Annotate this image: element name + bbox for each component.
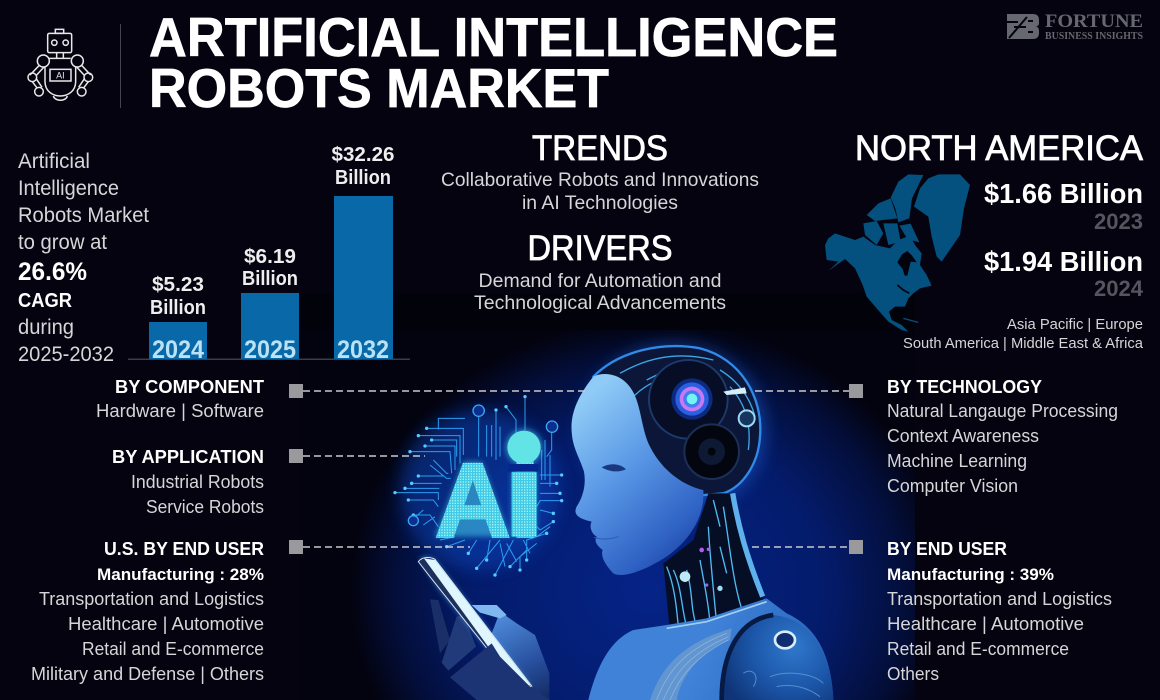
north america stats: Asia Pacific | Europe xyxy=(1007,316,1143,333)
trends block: Collaborative Robots and Innovations xyxy=(441,169,759,191)
CAGR text block xyxy=(18,150,149,366)
segment: by application xyxy=(112,446,264,517)
segment: by technology: Natural Langauge Processing xyxy=(887,401,1118,421)
robot body xyxy=(588,598,833,700)
drivers block: DRIVERS xyxy=(528,229,672,268)
segment: U.S. by end user: Transportation and Logistics xyxy=(39,589,264,609)
connector: by application xyxy=(289,449,425,463)
segment: by end user: Manufacturing : 39% xyxy=(887,566,1054,584)
bar 2032: $32.26 xyxy=(332,144,394,166)
robot skull xyxy=(593,346,760,497)
segment: by end user: BY END USER xyxy=(887,538,1007,559)
bar 2032: 2032 xyxy=(337,336,389,364)
segment: by application: Service Robots xyxy=(146,497,264,517)
bar 2032 xyxy=(332,144,394,364)
segment: by technology: BY TECHNOLOGY xyxy=(887,376,1043,397)
connector: by component xyxy=(289,384,585,398)
segment: by end user: Transportation and Logistics xyxy=(887,589,1112,609)
connector: by end user xyxy=(752,540,863,554)
segment: by component: Hardware | Software xyxy=(96,401,264,421)
north america stats xyxy=(855,129,1144,352)
logo: Fortune Business Insights: FORTUNE xyxy=(1045,12,1143,32)
robot neck xyxy=(663,493,763,633)
bar 2024: $5.23 xyxy=(152,274,204,296)
bar chart xyxy=(128,144,410,364)
drivers block: Technological Advancements xyxy=(474,292,726,314)
segment: U.S. by end user: Healthcare | Automotive xyxy=(68,614,264,634)
logo: Fortune Business Insights xyxy=(1007,12,1143,42)
segment: by technology: Machine Learning xyxy=(887,451,1027,471)
segment: by end user xyxy=(887,538,1112,684)
CAGR text block: Artificial xyxy=(18,150,90,173)
trends block: in AI Technologies xyxy=(522,192,678,214)
trends block: TRENDS xyxy=(532,129,668,168)
drivers block: Demand for Automation and xyxy=(478,270,722,292)
segment: by end user: Others xyxy=(887,664,939,684)
segment: U.S. by end user: U.S. BY END USER xyxy=(104,538,264,559)
north america stats: South America | Middle East & Africa xyxy=(903,335,1144,352)
segment: by application: Industrial Robots xyxy=(131,472,264,492)
bar 2032: Billion xyxy=(335,167,391,189)
segment: U.S. by end user: Retail and E-commerce xyxy=(82,639,264,659)
segment: by component: BY COMPONENT xyxy=(115,376,265,397)
segment: U.S. by end user xyxy=(31,538,264,684)
bar 2024 xyxy=(149,274,207,364)
segment: U.S. by end user: Military and Defense | Others xyxy=(31,664,264,684)
logo: Fortune Business Insights: BUSINESS INSIGHTS xyxy=(1045,31,1143,42)
CAGR text block: 2025-2032 xyxy=(18,343,114,366)
AI chip hologram: Ai xyxy=(435,443,540,560)
AI chip hologram xyxy=(393,395,563,577)
connector: by technology xyxy=(755,384,863,398)
bar 2025: Billion xyxy=(242,268,298,290)
north america map xyxy=(825,174,970,332)
CAGR text block: Intelligence xyxy=(18,177,119,200)
CAGR text block: 26.6% xyxy=(18,258,87,286)
north america stats: $1.94 Billion xyxy=(984,246,1143,277)
bar 2025 xyxy=(241,246,299,364)
bar 2025: 2025 xyxy=(244,336,296,364)
segment: by technology: Computer Vision xyxy=(887,476,1018,496)
north america stats: $1.66 Billion xyxy=(984,178,1143,209)
segment: by end user: Retail and E-commerce xyxy=(887,639,1069,659)
segment: by end user: Healthcare | Automotive xyxy=(887,614,1084,634)
bar 2025: $6.19 xyxy=(244,246,296,268)
drivers block xyxy=(474,229,726,314)
bar 2024: 2024 xyxy=(152,336,204,364)
segment: U.S. by end user: Manufacturing : 28% xyxy=(97,566,264,584)
segment: by technology: Context Awareness xyxy=(887,426,1039,446)
robot hand and phone xyxy=(418,557,550,700)
robot icon xyxy=(28,29,93,100)
CAGR text block: during xyxy=(18,316,74,339)
bar 2024: Billion xyxy=(150,297,206,319)
trends block xyxy=(441,129,759,214)
segment: by application: BY APPLICATION xyxy=(112,446,264,467)
header divider xyxy=(120,24,121,108)
north america stats: NORTH AMERICA xyxy=(855,129,1144,168)
robot mouth xyxy=(594,537,618,539)
head glow xyxy=(580,343,767,517)
title: ARTIFICIAL INTELLIGENCE xyxy=(149,6,838,68)
segment: by component xyxy=(96,376,265,421)
CAGR text block: Robots Market xyxy=(18,204,149,227)
robot eye xyxy=(602,464,626,471)
CAGR text block: CAGR xyxy=(18,290,73,312)
CAGR text block: to grow at xyxy=(18,231,107,254)
north america stats: 2024 xyxy=(1094,276,1144,301)
illustration: AI robot with phone xyxy=(300,293,915,700)
segment: by technology xyxy=(887,376,1118,496)
robot icon: AI xyxy=(56,71,65,81)
north america stats: 2023 xyxy=(1094,209,1143,234)
title xyxy=(149,6,838,119)
robot face xyxy=(571,374,703,575)
connector: U.S. by end user xyxy=(289,540,470,554)
title: ROBOTS MARKET xyxy=(149,57,609,119)
